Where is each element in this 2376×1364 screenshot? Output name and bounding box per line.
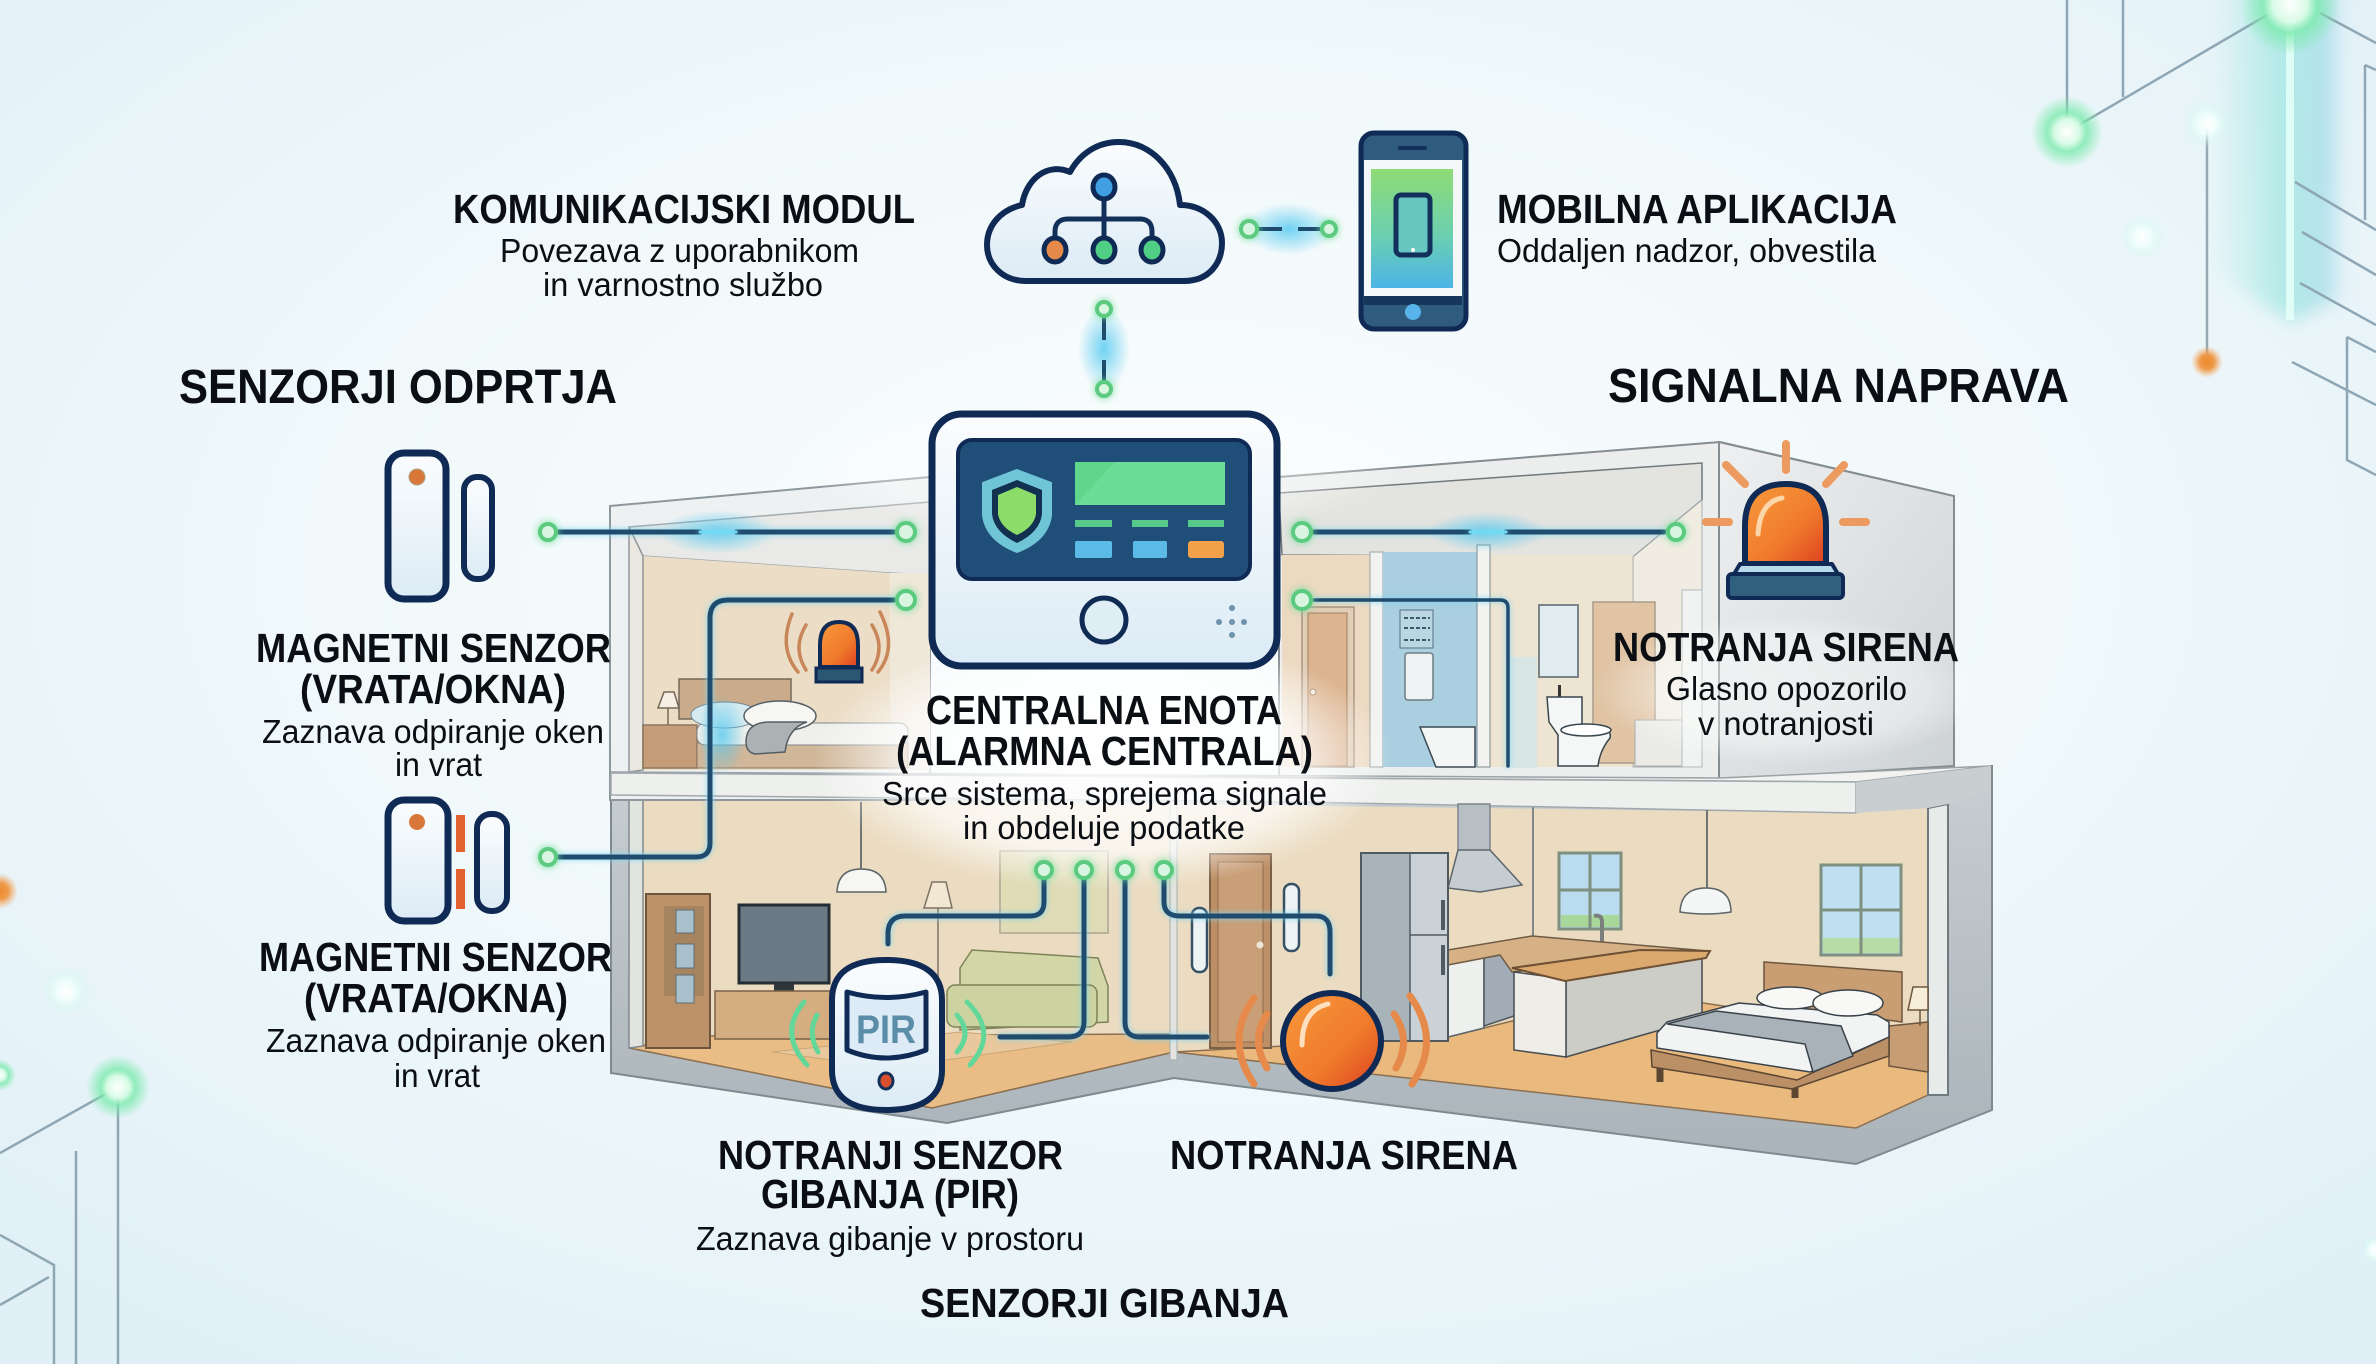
lamp [1908, 987, 1928, 1026]
title: komunikacijski modul [453, 186, 915, 303]
label: centralna enota: Srce sistema, sprejema signale [882, 775, 1327, 812]
label: magnetni senzor 1: MAGNETNI SENZOR [256, 625, 611, 671]
signal panel edge [1682, 590, 1702, 767]
bookcase [646, 894, 710, 1048]
icon: magnetic sensor top [388, 453, 492, 599]
back counter [1448, 936, 1708, 972]
basin [1420, 727, 1475, 767]
title: mobilna aplikacija: MOBILNA APLIKACIJA [1497, 186, 1897, 232]
pendant lamp [860, 802, 862, 869]
floor slab [611, 766, 1991, 813]
label: magnetni senzor 2: (VRATA/OKNA) [304, 975, 568, 1021]
bed base [1651, 1037, 1889, 1089]
living room furniture [646, 802, 1108, 1068]
label: magnetni senzor 2: Zaznava odpiranje oken [266, 1022, 606, 1059]
upper bedroom furniture [643, 679, 908, 775]
white top fade [804, 400, 1404, 540]
connector: cloud to phone [1241, 203, 1336, 255]
label: notranja sirena right: Glasno opozorilo [1666, 670, 1907, 707]
title: komunikacijski modul: in varnostno službo [543, 266, 823, 303]
right room floor [1174, 980, 1928, 1128]
door upstairs [1302, 607, 1354, 767]
title: komunikacijski modul: KOMUNIKACIJSKI MODUL [453, 186, 915, 232]
window [1559, 853, 1621, 929]
label: notranji senzor gibanja: NOTRANJI SENZOR [718, 1132, 1063, 1178]
label: centralna enota: CENTRALNA ENOTA [926, 687, 1282, 733]
screen [958, 440, 1250, 579]
title: mobilna aplikacija: Oddaljen nadzor, obvestila [1497, 232, 1877, 269]
house cutaway illustration [610, 400, 1992, 1164]
bedroom downstairs [1651, 810, 1928, 1098]
door and door sensor [1192, 854, 1299, 1048]
floor lamp [924, 882, 952, 1010]
label: magnetni senzor 2: in vrat [394, 1057, 480, 1094]
centre partition [1170, 800, 1177, 1060]
label: notranja sirena bottom: NOTRANJA SIRENA [1170, 1132, 1518, 1178]
icon: PIR motion sensor [792, 960, 984, 1110]
picture [1000, 851, 1108, 933]
cabinets [1448, 958, 1484, 1037]
oven [1484, 950, 1520, 1026]
title: mobilna aplikacija [1497, 186, 1897, 269]
white glow at right room label [1595, 615, 1985, 765]
heading: senzorji odprtja: SENZORJI ODPRTJA [179, 361, 617, 414]
nightstand [1889, 1022, 1928, 1072]
kitchen [1361, 804, 1710, 1057]
label: notranji senzor gibanja: GIBANJA (PIR) [761, 1171, 1019, 1217]
lower floor back wall [629, 797, 1928, 1128]
label: notranji senzor gibanja [696, 1132, 1084, 1257]
panel: central alarm unit [932, 414, 1277, 666]
toilet [1547, 685, 1611, 766]
shield [983, 470, 1051, 552]
heading: senzorji gibanja: SENZORJI GIBANJA [920, 1280, 1289, 1326]
mattress [1657, 1003, 1889, 1072]
icon: cloud communication module [987, 142, 1222, 281]
round button [1082, 598, 1126, 642]
label: centralna enota [882, 687, 1327, 846]
label: notranja sirena right: v notranjosti [1698, 705, 1874, 742]
label: centralna enota: in obdeluje podatke [963, 809, 1245, 846]
pendant lamp [1706, 810, 1708, 888]
label: notranji senzor gibanja: Zaznava gibanje v prostoru [696, 1220, 1084, 1257]
icon: PIR motion sensor: PIR [856, 1008, 916, 1052]
label: notranja sirena right: NOTRANJA SIRENA [1613, 624, 1959, 670]
label: magnetni senzor 2: MAGNETNI SENZOR [259, 934, 612, 980]
rug [772, 1032, 1072, 1068]
lower left post [629, 797, 643, 1048]
decoration: bottom left circuit lines [0, 873, 2376, 1364]
label: magnetni senzor 1: Zaznava odpiranje oken [262, 713, 604, 750]
icon: signal siren [1706, 444, 1866, 598]
headboard [1764, 962, 1902, 1022]
blanket [1667, 1011, 1853, 1072]
fridge [1361, 853, 1448, 1041]
label: magnetni senzor 2 [259, 934, 612, 1094]
icon: mobile phone [1361, 133, 1466, 329]
label: magnetni senzor 1 [256, 625, 611, 783]
decoration: top right circuit lines [2031, 0, 2376, 475]
upper left room [610, 477, 930, 800]
tv [739, 905, 829, 983]
glass panel [1510, 657, 1537, 768]
label: centralna enota: (ALARMNA CENTRALA) [896, 728, 1313, 774]
upper right room [1279, 442, 1954, 782]
shower rail and towel [1400, 610, 1433, 700]
icon: indoor siren ball [1239, 993, 1427, 1089]
title: komunikacijski modul: Povezava z uporabnikom [500, 232, 859, 269]
island [1566, 957, 1702, 1057]
lower floor boards [629, 1034, 1174, 1108]
icon: magnetic sensor bottom [388, 800, 507, 921]
label: magnetni senzor 1: in vrat [395, 746, 482, 783]
mirror [1539, 605, 1578, 677]
lower right post [1928, 804, 1948, 1095]
pillows [1757, 987, 1823, 1009]
sofa [960, 950, 1108, 1030]
keypad dots [1216, 605, 1247, 638]
lower floor shell [611, 766, 1992, 1164]
heading: signalna naprava: SIGNALNA NAPRAVA [1608, 360, 2069, 413]
white glow behind central labels [814, 630, 1394, 890]
connectors from central unit to sensors [540, 510, 1684, 1037]
connector: cloud to central unit [1078, 302, 1130, 396]
label: magnetni senzor 1: (VRATA/OKNA) [300, 666, 566, 712]
kitchen corner line [1532, 805, 1534, 940]
label: notranja sirena right [1613, 624, 1959, 742]
bed legs [1660, 1065, 1795, 1098]
wardrobe [1593, 602, 1655, 763]
window [1821, 865, 1901, 955]
hood [1458, 804, 1490, 852]
small siren in bedroom [786, 612, 889, 682]
tv console [715, 991, 830, 1039]
faucet [1594, 916, 1602, 945]
